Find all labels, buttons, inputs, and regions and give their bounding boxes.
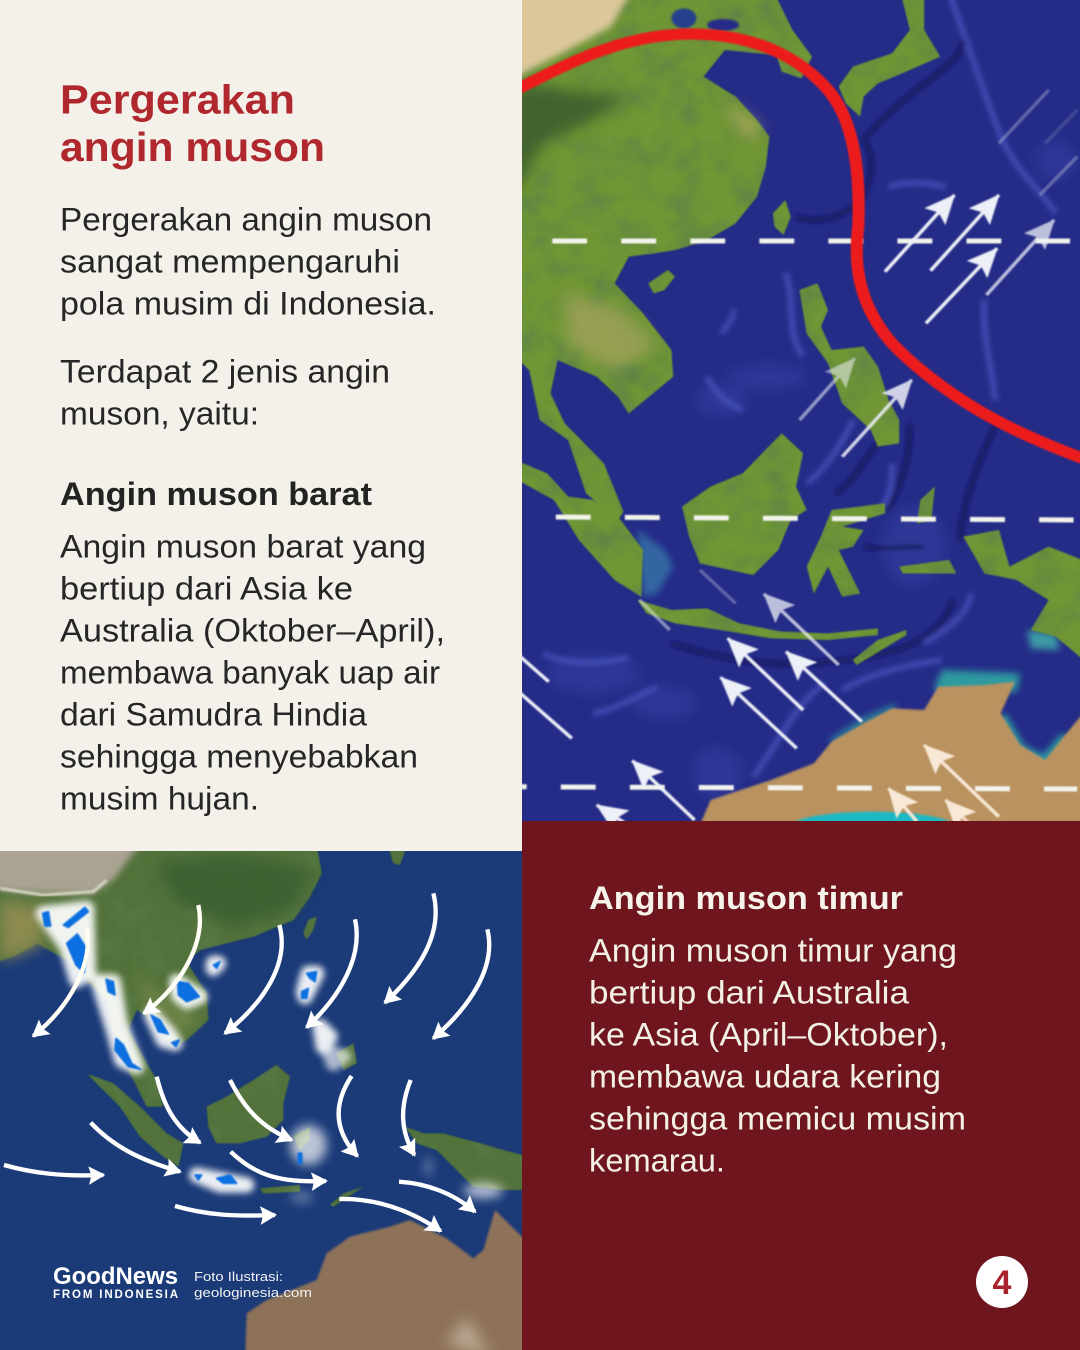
- rain clouds: [43, 907, 503, 1203]
- text block: Angin muson timur: bertiup dari Australia: [589, 974, 909, 1010]
- text block: Angin muson barat: Angin muson barat yang: [60, 528, 426, 564]
- text block: Angin muson timur: membawa udara kering: [589, 1058, 941, 1094]
- text block: Angin muson timur: [589, 932, 966, 1178]
- title: [60, 76, 325, 170]
- text block: Angin muson timur: sehingga memicu musim: [589, 1100, 966, 1136]
- text block: Angin muson timur: Angin muson timur yang: [589, 932, 957, 968]
- page number badge: 4: [993, 1264, 1012, 1302]
- shallow shelf water: [638, 530, 1066, 762]
- text block: introduction: [60, 202, 436, 322]
- photo credit: [194, 1269, 312, 1300]
- Small islands: [260, 1185, 300, 1193]
- Taiwan: [773, 200, 791, 235]
- text block: Angin muson barat: musim hujan.: [60, 780, 259, 816]
- logo: GoodNews from Indonesia: GoodNews: [53, 1263, 178, 1290]
- Asia mainland: [508, 0, 812, 520]
- Sulawesi: [293, 1127, 310, 1150]
- land colour variation: [0, 853, 490, 1350]
- text block: Angin muson barat: [60, 528, 445, 816]
- Japan: [839, 0, 940, 117]
- heading: Angin muson timur: Angin muson timur: [589, 880, 903, 916]
- land masses: [0, 837, 533, 1207]
- Halmahera and Seram: [917, 487, 935, 523]
- Borneo: [207, 1065, 290, 1143]
- Philippines: [800, 283, 899, 447]
- red monsoon boundary: [518, 34, 1080, 459]
- text block: Angin muson barat: membawa banyak uap air: [60, 654, 440, 690]
- panel: map of west monsoon rain and wind: [0, 851, 1019, 1350]
- Borneo: [682, 433, 807, 575]
- Australia: [696, 682, 1080, 833]
- text block: Angin muson barat: dari Samudra Hindia: [60, 696, 367, 732]
- land colour variation: [511, 83, 760, 370]
- land masses: [508, 0, 1080, 667]
- text block: two types: Terdapat 2 jenis angin: [60, 354, 390, 390]
- sea floor relief: [543, 0, 1077, 800]
- photo credit: geologinesia.com: [194, 1285, 312, 1300]
- text block: introduction: Pergerakan angin muson: [60, 202, 432, 238]
- photo credit: Foto Ilustrasi:: [194, 1269, 283, 1284]
- text block: two types: muson, yaitu:: [60, 396, 259, 432]
- Sulawesi: [807, 503, 885, 597]
- New Guinea: [405, 1127, 533, 1190]
- page number badge: [976, 1256, 1028, 1308]
- Java and islands: [638, 600, 878, 640]
- text block: Angin muson timur: kemarau.: [589, 1142, 725, 1178]
- Hainan: [648, 270, 675, 293]
- heading: Angin muson barat: Angin muson barat: [60, 476, 372, 512]
- Tibet plateau: [511, 0, 632, 80]
- Sumatra: [87, 1074, 183, 1167]
- Australia: [245, 1210, 533, 1350]
- equator and tropic dashed lines: [492, 241, 1077, 789]
- text block: Angin muson barat: sehingga menyebabkan: [60, 738, 418, 774]
- wind arrows: [4, 893, 489, 1231]
- Himalaya and Tibet: [0, 840, 143, 893]
- Bohai sea: [671, 8, 739, 31]
- Himalaya snow ridge: [0, 880, 107, 895]
- Taiwan: [303, 917, 317, 939]
- text block: introduction: pola musim di Indonesia.: [60, 286, 436, 322]
- text block: Angin muson timur: ke Asia (April–Oktober),: [589, 1016, 948, 1052]
- logo: GoodNews from Indonesia: FROM INDONESIA: [53, 1289, 178, 1301]
- monsoon wind arrows: [518, 90, 1077, 825]
- text block: Angin muson barat: Australia (Oktober–April),: [60, 612, 445, 648]
- panel: map of east monsoon over Southeast Asia: [522, 0, 1080, 821]
- panel: dark red background: [522, 821, 1080, 1350]
- title: Pergerakan: [60, 76, 295, 122]
- text block: Angin muson barat: bertiup dari Asia ke: [60, 570, 353, 606]
- New Guinea: [963, 530, 1080, 667]
- text block: introduction: sangat mempengaruhi: [60, 244, 400, 280]
- Sumatra: [511, 458, 643, 597]
- Turquoise bight: [791, 812, 954, 842]
- text block: two types: [60, 354, 390, 432]
- Asia mainland: [0, 837, 322, 1107]
- title: angin muson: [60, 124, 325, 170]
